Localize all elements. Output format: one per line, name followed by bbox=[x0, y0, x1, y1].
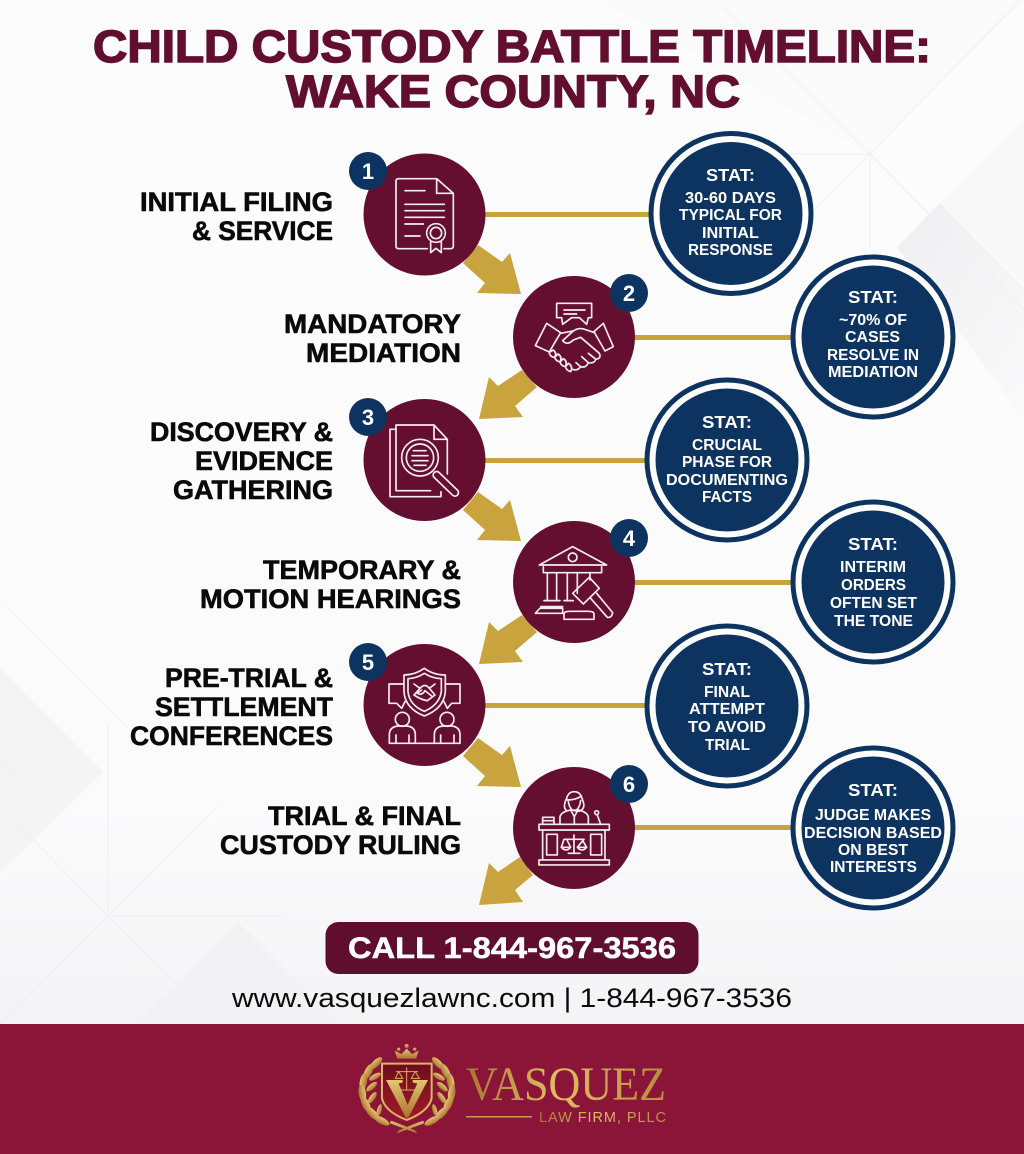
arrow to step 2 bbox=[463, 245, 521, 294]
label: trial and final custody ruling: TRIAL & FINAL bbox=[268, 801, 461, 831]
stat circle 2 bbox=[793, 257, 953, 417]
number badge 5 bbox=[349, 643, 387, 681]
label: temporary and motion hearings bbox=[200, 555, 461, 614]
step 5: pre-trial and settlement conferences bbox=[130, 626, 807, 787]
call button: CALL 1-844-967-3536 bbox=[348, 932, 676, 965]
label: mandatory mediation bbox=[284, 309, 461, 368]
stat circle 4: INTERIM bbox=[840, 559, 906, 576]
stat circle 3: DOCUMENTING bbox=[666, 472, 788, 489]
stat circle 4: STAT: bbox=[848, 534, 898, 554]
step 2: mandatory mediation bbox=[284, 257, 953, 419]
stat circle 3 bbox=[647, 380, 807, 540]
stat circle 6: INTERESTS bbox=[830, 859, 917, 876]
label: trial and final custody ruling: CUSTODY RULING bbox=[220, 830, 461, 860]
number badge 2 bbox=[610, 274, 648, 312]
label: trial and final custody ruling bbox=[220, 801, 461, 860]
step 6 circle bbox=[513, 767, 635, 889]
stat circle 1: 30-60 DAYS bbox=[685, 190, 776, 207]
stat circle 3: CRUCIAL bbox=[692, 437, 762, 454]
step 5 circle bbox=[364, 644, 486, 766]
logo crest bbox=[357, 1044, 456, 1133]
stat circle 1: INITIAL bbox=[702, 225, 759, 242]
icon: shield and two people bbox=[389, 668, 460, 743]
number badge 1: 1 bbox=[362, 159, 374, 184]
label: discovery and evidence gathering: GATHERING bbox=[173, 475, 333, 505]
connector to stat 4 bbox=[630, 580, 795, 585]
label: discovery and evidence gathering: DISCOVERY & bbox=[150, 417, 333, 447]
number badge 1 bbox=[349, 152, 387, 190]
stat circle 4: THE TONE bbox=[834, 613, 913, 630]
stat circle 5: STAT: bbox=[702, 659, 752, 679]
connector to stat 2 bbox=[630, 335, 795, 340]
stat circle 3: PHASE FOR bbox=[682, 454, 772, 471]
left laurel bbox=[357, 1055, 417, 1133]
arrow to step 6 bbox=[463, 738, 521, 787]
stat circle 6 bbox=[793, 748, 953, 908]
number badge 5: 5 bbox=[362, 650, 374, 675]
logo: Vasquez Law Firm bbox=[357, 1044, 666, 1133]
stat circle 6: JUDGE MAKES bbox=[815, 807, 931, 824]
title: WAKE COUNTY, NC bbox=[286, 66, 740, 117]
stat circle 5: ATTEMPT bbox=[689, 701, 766, 718]
number badge 4 bbox=[610, 519, 648, 557]
icon: handshake with speech bubble bbox=[535, 303, 613, 372]
wordmark VASQUEZ: VASQUEZ bbox=[466, 1058, 666, 1111]
connector to stat 3 bbox=[480, 458, 652, 463]
stat circle 5: TO AVOID bbox=[688, 719, 766, 736]
number badge 3: 3 bbox=[362, 405, 374, 430]
number badge 3 bbox=[349, 398, 387, 436]
label: temporary and motion hearings: MOTION HEARINGS bbox=[200, 584, 461, 614]
connector to stat 6 bbox=[630, 825, 795, 830]
icon: document and magnifier bbox=[390, 425, 455, 497]
label: initial filing and service bbox=[140, 187, 333, 246]
label: mandatory mediation: MANDATORY bbox=[284, 309, 461, 339]
stat circle 6: ON BEST bbox=[838, 842, 909, 859]
arrow to step 5 bbox=[479, 615, 537, 664]
call button bbox=[326, 922, 698, 974]
website and phone line: www.vasquezlawnc.com | 1-844-967-3536 bbox=[231, 983, 792, 1013]
label: pre-trial and settlement conferences: CONFERENCES bbox=[130, 721, 333, 751]
wordmark LAW FIRM, PLLC: LAW FIRM, PLLC bbox=[539, 1110, 666, 1126]
wordmark rule bbox=[466, 1116, 532, 1118]
stat circle 1 bbox=[651, 134, 811, 294]
stat circle 6: DECISION BASED bbox=[804, 825, 942, 842]
step 4: temporary and motion hearings bbox=[200, 502, 953, 664]
icon: courthouse and gavel bbox=[535, 547, 613, 619]
title bbox=[93, 21, 931, 117]
label: initial filing and service: INITIAL FILING bbox=[140, 187, 333, 217]
stat circle 5 bbox=[647, 626, 807, 786]
label: mandatory mediation: MEDIATION bbox=[306, 338, 461, 368]
connector to stat 5 bbox=[480, 703, 652, 708]
label: discovery and evidence gathering: EVIDENCE bbox=[195, 446, 333, 476]
label: initial filing and service: & SERVICE bbox=[192, 216, 333, 246]
icon: certified document bbox=[396, 179, 453, 253]
number badge 6: 6 bbox=[623, 772, 635, 797]
stat circle 1: TYPICAL FOR bbox=[679, 207, 782, 224]
V emblem bbox=[386, 1080, 428, 1117]
stat circle 4: ORDERS bbox=[841, 577, 906, 594]
shield bbox=[382, 1064, 432, 1120]
right laurel bbox=[397, 1055, 456, 1133]
footer band bbox=[0, 1024, 1024, 1154]
title: CHILD CUSTODY BATTLE TIMELINE: bbox=[93, 21, 931, 72]
arrow to step 3 bbox=[479, 370, 537, 419]
number badge 2: 2 bbox=[623, 281, 635, 306]
stat circle 6: STAT: bbox=[848, 780, 898, 800]
arrow from step 6 bbox=[479, 857, 533, 905]
stat circle 5: FINAL bbox=[704, 684, 750, 701]
arrow to step 4 bbox=[463, 492, 521, 541]
stat circle 1: RESPONSE bbox=[688, 242, 773, 259]
stat circle 4: OFTEN SET bbox=[830, 595, 918, 612]
label: pre-trial and settlement conferences: PRE-TRIAL & bbox=[165, 663, 333, 693]
step 6: trial and final custody ruling bbox=[220, 748, 953, 908]
step 1 circle bbox=[364, 154, 486, 276]
label: discovery and evidence gathering bbox=[150, 417, 333, 505]
stat circle 2: MEDIATION bbox=[828, 364, 918, 381]
stat circle 3: STAT: bbox=[702, 412, 752, 432]
step 4 circle bbox=[513, 521, 635, 643]
step 1: initial filing and service bbox=[140, 134, 811, 294]
icon: judge at bench bbox=[539, 792, 609, 865]
label: pre-trial and settlement conferences bbox=[130, 663, 333, 751]
number badge 6 bbox=[610, 765, 648, 803]
stat circle 1: STAT: bbox=[706, 165, 755, 185]
label: pre-trial and settlement conferences: SETTLEMENT bbox=[155, 692, 333, 722]
stat circle 3: FACTS bbox=[702, 489, 752, 506]
stat circle 2: STAT: bbox=[848, 287, 898, 307]
stat circle 5: TRIAL bbox=[705, 737, 750, 754]
step 3: discovery and evidence gathering bbox=[150, 380, 807, 541]
stat circle 4 bbox=[793, 502, 953, 662]
scales of justice bbox=[395, 1067, 419, 1090]
stat circle 2: CASES bbox=[845, 329, 900, 346]
crown bbox=[395, 1044, 419, 1059]
step 2 circle bbox=[513, 276, 635, 398]
step 3 circle bbox=[364, 399, 486, 521]
stat circle 2: RESOLVE IN bbox=[827, 347, 919, 364]
connector to stat 1 bbox=[480, 212, 655, 217]
label: temporary and motion hearings: TEMPORARY & bbox=[263, 555, 461, 585]
number badge 4: 4 bbox=[623, 526, 636, 551]
stat circle 2: ~70% OF bbox=[839, 312, 907, 329]
